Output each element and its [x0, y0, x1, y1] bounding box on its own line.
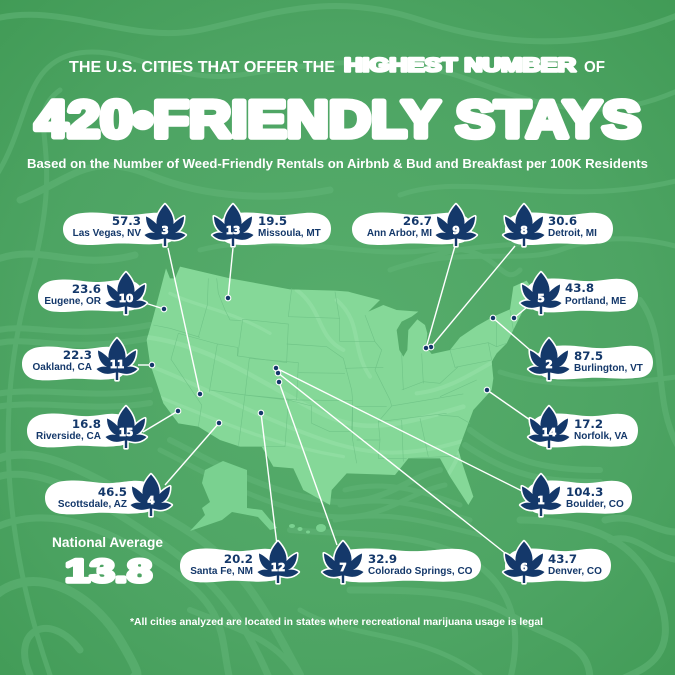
title line: HIGHEST NUMBER	[344, 56, 576, 76]
callout: Burlington: Burlington, VT	[574, 363, 643, 374]
callout: Riverside: 16.8	[72, 417, 101, 431]
callout: Colorado Springs	[276, 379, 481, 583]
Alaska and Hawaii	[190, 461, 326, 534]
callout: Scottsdale: Scottsdale, AZ	[58, 499, 127, 510]
callout: Ann Arbor: Ann Arbor, MI	[367, 228, 432, 239]
callout: Las Vegas: 3	[161, 225, 169, 237]
callout: Portland: 5	[537, 293, 545, 305]
callout: Burlington	[490, 315, 653, 380]
callout: Santa Fe	[180, 410, 298, 583]
callout: Denver: Denver, CO	[548, 566, 602, 577]
callout: Boulder: Boulder, CO	[566, 499, 624, 510]
title line	[69, 56, 605, 76]
callout: Burlington: 87.5	[574, 349, 603, 363]
callout: Eugene: Eugene, OR	[44, 296, 102, 307]
map of the United States	[143, 267, 535, 534]
callout: Colorado Springs: 32.9	[368, 552, 397, 566]
callout: Las Vegas: 57.3	[112, 214, 141, 228]
callout: Eugene: 10	[119, 293, 133, 305]
callout: Riverside: 15	[119, 427, 133, 439]
callout: Detroit	[428, 204, 613, 350]
callout: Oakland: 22.3	[63, 348, 92, 362]
callout: Ann Arbor: 9	[452, 225, 460, 237]
callout: Norfolk: Norfolk, VA	[574, 431, 628, 442]
callout: Colorado Springs: 7	[339, 562, 347, 574]
callout: Santa Fe: Santa Fe, NM	[190, 566, 253, 577]
callout: Detroit: 8	[520, 225, 528, 237]
callout: Boulder: 1	[537, 495, 545, 507]
callout: Portland	[511, 272, 638, 321]
title line: OF	[584, 59, 605, 76]
callout: Portland: Portland, ME	[565, 296, 626, 307]
callout: Boulder: 104.3	[566, 485, 603, 499]
main heading: 420•FRIENDLY STAYS	[35, 91, 641, 149]
callout: Denver: 6	[520, 562, 528, 574]
callout: Boulder	[273, 365, 632, 516]
national average	[52, 535, 163, 589]
callout: Scottsdale	[45, 420, 222, 516]
callout: Missoula: Missoula, MT	[258, 228, 321, 239]
callout: Oakland: 11	[110, 359, 124, 371]
callout: Riverside: Riverside, CA	[36, 431, 101, 442]
title line: THE U.S. CITIES THAT OFFER THE	[69, 59, 335, 76]
callout: Oakland	[22, 338, 155, 380]
footnote: *All cities analyzed are located in states where recreational marijuana usage is legal	[130, 616, 543, 628]
national average: 13.8	[65, 553, 152, 589]
callout: Norfolk: 14	[542, 427, 556, 439]
callout: Detroit: Detroit, MI	[548, 228, 597, 239]
callout: Detroit: 30.6	[548, 214, 577, 228]
callout: Missoula	[212, 204, 331, 301]
callout: Santa Fe: 12	[271, 562, 285, 574]
callout: Scottsdale: 46.5	[98, 485, 127, 499]
callout: Denver: 43.7	[548, 552, 577, 566]
callout: Santa Fe: 20.2	[224, 552, 253, 566]
callout: Oakland: Oakland, CA	[33, 362, 92, 373]
callout: Ann Arbor: 26.7	[403, 214, 432, 228]
national average: National Average	[52, 535, 163, 550]
callout: Eugene: 23.6	[72, 282, 101, 296]
callout: Las Vegas: Las Vegas, NV	[73, 228, 141, 239]
callout: Las Vegas	[63, 204, 203, 397]
subtitle: Based on the Number of Weed-Friendly Rentals on Airbnb & Bud and Breakfast per 100K Residents	[27, 156, 648, 171]
callout: Norfolk	[484, 387, 638, 448]
callout: Scottsdale: 4	[147, 495, 155, 507]
callout: Colorado Springs: Colorado Springs, CO	[368, 566, 473, 577]
callout: Burlington: 2	[545, 359, 553, 371]
callout: Ann Arbor	[352, 204, 476, 351]
callout: Riverside	[27, 406, 181, 448]
callout: Missoula: 19.5	[258, 214, 287, 228]
callout: Missoula: 13	[226, 225, 240, 237]
callout: Portland: 43.8	[565, 281, 594, 295]
callout: Eugene	[38, 272, 167, 314]
callout: Denver	[275, 370, 611, 583]
callout: Norfolk: 17.2	[574, 417, 603, 431]
